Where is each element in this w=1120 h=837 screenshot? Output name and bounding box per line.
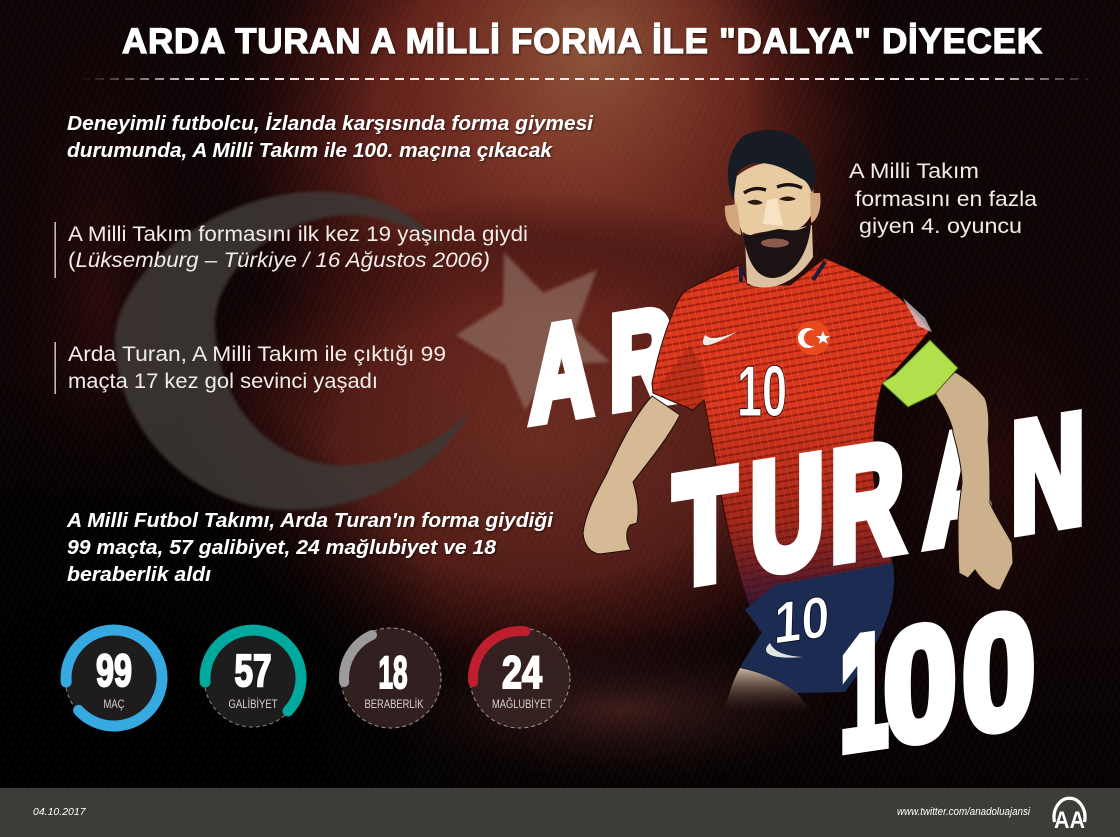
record summary text: 99 maçta, 57 galibiyet, 24 mağlubiyet ve 18	[67, 537, 497, 559]
logo: Anadolu Agency: AA	[1054, 807, 1085, 834]
jersey	[652, 258, 930, 632]
beard	[743, 222, 811, 278]
big name: TURAN: TURAN	[674, 381, 1085, 618]
fact: goals	[54, 342, 446, 394]
stat: 24 losses	[470, 628, 570, 728]
stat: 99 matches: MAÇ	[104, 697, 125, 711]
stat: 18 draws: BERABERLİK	[364, 697, 424, 711]
sleeve patch	[903, 298, 932, 332]
intro text: durumunda, A Milli Takım ile 100. maçına çıkacak	[67, 140, 553, 162]
stat: 99 matches	[65, 629, 163, 727]
crest	[796, 321, 830, 355]
stat: 18 draws: 18	[378, 647, 408, 698]
caption: 4th most capped: giyen 4. oyuncu	[859, 215, 1022, 238]
eyebrows	[744, 185, 802, 193]
stat: 57 wins: GALİBİYET	[228, 697, 278, 711]
jersey number: 10	[737, 352, 787, 432]
fact: first cap	[54, 222, 528, 278]
right forearm	[935, 372, 1013, 590]
stat: 57 wins	[204, 629, 302, 727]
nose	[763, 198, 783, 226]
hair	[728, 130, 815, 200]
stat: 57 wins: 57	[234, 645, 272, 696]
stat: 24 losses: MAĞLUBİYET	[492, 696, 553, 711]
captain armband	[882, 340, 958, 407]
player illustration	[583, 130, 932, 712]
record summary text: A Milli Futbol Takımı, Arda Turan'ın forma giydiği	[66, 510, 553, 532]
title: ARDA TURAN A MİLLİ FORMA İLE "DALYA" DİYECEK	[122, 22, 1042, 61]
collar	[741, 262, 825, 282]
shorts	[740, 563, 894, 693]
dashed divider	[80, 78, 1088, 80]
stat: 18 draws	[341, 628, 441, 728]
flag crescent	[115, 192, 472, 510]
jersey swoosh	[703, 332, 737, 345]
shorts swoosh	[766, 643, 803, 658]
fact: first cap: (Lüksemburg – Türkiye / 16 Ağustos 2006)	[68, 249, 490, 272]
stat: 24 losses: 24	[502, 647, 542, 698]
date: 04.10.2017	[33, 806, 87, 818]
eyes	[747, 196, 796, 205]
ears	[725, 193, 821, 235]
mouth	[761, 238, 789, 248]
jersey lower shading	[708, 400, 893, 632]
big number: 100: 00	[884, 579, 1035, 779]
face	[734, 162, 813, 238]
big name: AR: AR	[530, 279, 673, 450]
logo: Anadolu Agency	[1054, 798, 1085, 834]
fact: goals: maçta 17 kez gol sevinci yaşadı	[68, 370, 378, 393]
shorts number: 10	[769, 584, 833, 657]
source url: www.twitter.com/anadoluajansi	[897, 806, 1030, 818]
sleeve shading	[653, 345, 704, 410]
stat: 99 matches: 99	[96, 645, 132, 696]
intro text: Deneyimli futbolcu, İzlanda karşısında forma giymesi	[67, 112, 593, 135]
neck	[745, 225, 813, 288]
caption: 4th most capped: A Milli Takım	[849, 160, 979, 183]
big number: 100: 1	[839, 600, 888, 785]
record summary text: beraberlik aldı	[67, 564, 211, 586]
fact: goals: Arda Turan, A Milli Takım ile çıktığı 99	[68, 343, 446, 366]
flag star	[456, 252, 610, 410]
footer bar	[0, 788, 1120, 837]
fact: first cap: A Milli Takım formasını ilk kez 19 yaşında giydi	[68, 223, 528, 246]
left arm	[583, 396, 680, 554]
leg	[725, 668, 812, 712]
caption: 4th most capped: formasını en fazla	[855, 188, 1037, 211]
